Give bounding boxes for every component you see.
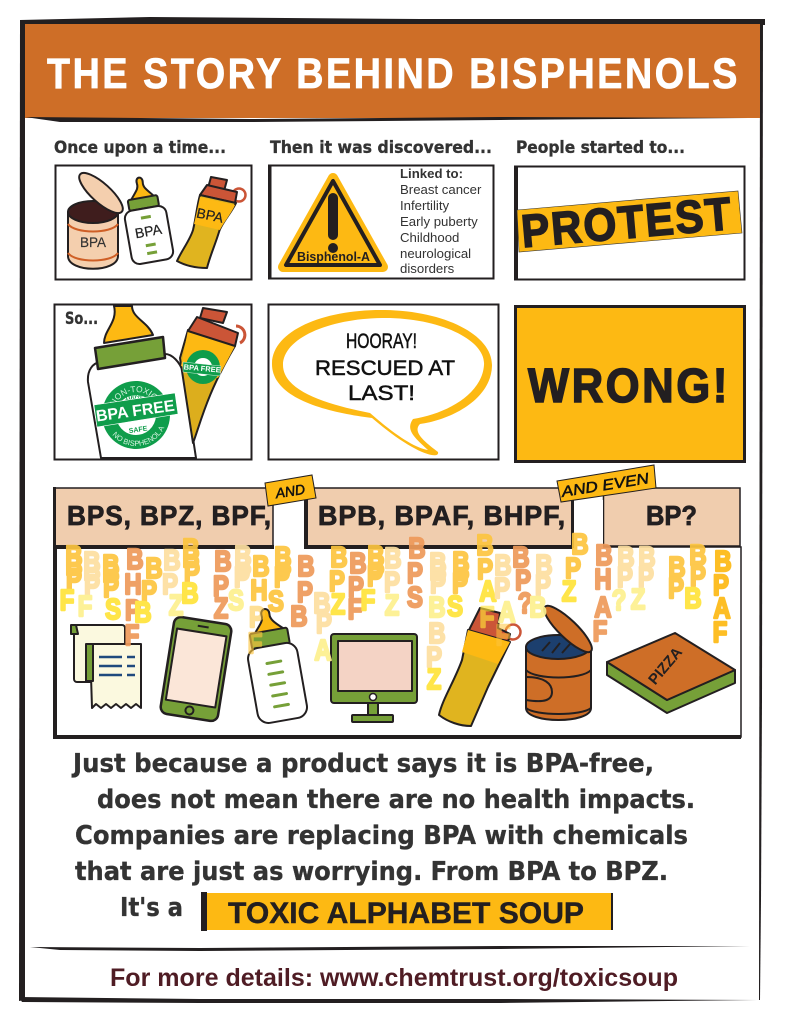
falling bisphenol letters: F [593, 615, 607, 648]
icon: baby bottle with BPA: BPA [134, 221, 164, 241]
falling bisphenol letters: B [234, 549, 252, 582]
falling bisphenol letters: P [348, 571, 364, 604]
falling bisphenol letters: Z [562, 575, 576, 608]
icon: sports bottle [439, 608, 520, 726]
falling bisphenol letters: A [314, 634, 332, 667]
falling bisphenol letters: A [594, 591, 612, 624]
falling bisphenol letters: P [141, 575, 157, 608]
badge: bpa free: NO BISPHENOL A [112, 427, 164, 446]
panel: hooray speech bubble [268, 304, 498, 460]
icon: open can [526, 600, 597, 720]
panel: alphabet soup [53, 465, 741, 739]
icon: monitor [331, 634, 417, 722]
falling bisphenol letters: P [477, 553, 493, 586]
falling bisphenol letters: P [213, 570, 229, 603]
falling bisphenol letters: B [689, 539, 707, 572]
falling bisphenol letters: A [479, 575, 497, 608]
falling bisphenol letters: B [408, 532, 426, 565]
body text [71, 749, 695, 887]
body text: does not mean there are no health impacts. [97, 785, 695, 815]
falling bisphenol letters: A [713, 592, 731, 625]
text: it's a: It's a [120, 893, 183, 923]
speech bubble [272, 310, 492, 455]
falling bisphenol letters: P [515, 564, 531, 597]
body text: that are just as worrying. From BPA to BPZ. [75, 857, 668, 887]
linked health effects list: Infertility [400, 198, 450, 213]
falling bisphenol letters: S [407, 581, 423, 614]
falling bisphenol letters: B [571, 528, 589, 561]
falling bisphenol letters: F [480, 601, 494, 634]
heading: people started to: People started to... [516, 138, 685, 158]
falling bisphenol letters: B [126, 543, 144, 576]
linked health effects list: Breast cancer [400, 182, 482, 197]
falling bisphenol letters: B [512, 541, 530, 574]
footer link: For more details: www.chemtrust.org/toxicsoup [110, 964, 678, 992]
speech text: LAST! [348, 382, 415, 405]
falling bisphenol letters: F [60, 584, 74, 617]
icon: phone [160, 616, 232, 722]
linked health effects list: Childhood [400, 230, 459, 245]
falling bisphenol letters: P [234, 561, 250, 594]
linked health effects list: disorders [400, 261, 455, 276]
icon: sports bottle with BPA: BPA [195, 204, 226, 226]
panel: protest [514, 166, 744, 280]
falling bisphenol letters: B [214, 545, 232, 578]
sticker: and even: AND EVEN [559, 470, 650, 501]
icon: sports bottle with BPA [177, 177, 246, 268]
badge: small bpa free [183, 350, 221, 384]
falling bisphenol letters: B [274, 541, 292, 574]
icon: warning triangle: Bisphenol-A [297, 250, 370, 264]
falling bisphenol letters: B [349, 547, 367, 580]
falling bisphenol letters: H [250, 574, 268, 607]
falling bisphenol letters: S [228, 584, 244, 617]
protest sticker [517, 191, 742, 252]
label box: BPS BPZ BPF [53, 487, 274, 549]
falling bisphenol letters: P [713, 569, 729, 602]
badge: bpa free [94, 381, 178, 449]
falling bisphenol letters: F [78, 590, 92, 623]
falling bisphenol letters: ? [518, 587, 532, 620]
falling bisphenol letters: B [428, 591, 446, 624]
label box: BPB BPAF BHPF [304, 488, 574, 549]
protest word: PROTEST [519, 187, 735, 257]
falling bisphenol letters: B [234, 540, 252, 573]
falling bisphenol letters: F [125, 619, 139, 652]
falling bisphenol letters: B [535, 549, 553, 582]
icon: baby bottle [240, 605, 309, 725]
falling bisphenol letters: P [162, 568, 178, 601]
falling bisphenol letters [60, 528, 732, 696]
falling bisphenol letters: B [83, 554, 101, 587]
icon: small tilted bottle [180, 308, 245, 443]
falling bisphenol letters: Z [169, 589, 183, 622]
icon: baby bottle with BPA [118, 174, 174, 265]
falling bisphenol letters: B [181, 577, 199, 610]
falling bisphenol letters: B [617, 541, 635, 574]
falling bisphenol letters: P [426, 641, 442, 674]
falling bisphenol letters: S [268, 585, 284, 618]
falling bisphenol letters: S [447, 590, 463, 623]
falling bisphenol letters: Z [427, 663, 441, 696]
sticker: and [265, 475, 316, 506]
linked health effects list: Early puberty [400, 214, 478, 229]
falling bisphenol letters: P [384, 566, 400, 599]
icon: receipts [71, 625, 141, 708]
falling bisphenol letters: B [252, 550, 270, 583]
falling bisphenol letters: P [430, 567, 446, 600]
falling bisphenol letters: P [66, 563, 82, 596]
falling bisphenol letters: B [65, 549, 83, 582]
falling bisphenol letters: P [84, 569, 100, 602]
falling bisphenol letters: P [367, 560, 383, 593]
panel: wrong [516, 306, 744, 462]
falling bisphenol letters: B [182, 533, 200, 566]
linked health effects list: Linked to: [400, 166, 463, 181]
falling bisphenol letters: B [313, 587, 331, 620]
falling bisphenol letters: B [297, 550, 315, 583]
icon: pizza box [607, 633, 735, 713]
body text: Just because a product says it is BPA-free, [71, 749, 654, 779]
icon: pizza box: PIZZA [645, 644, 686, 688]
icon: food can with BPA [68, 167, 128, 269]
falling bisphenol letters: B [384, 542, 402, 575]
panel: warning [268, 165, 494, 279]
falling bisphenol letters: B [452, 546, 470, 579]
badge: bpa free: BPA FREE [95, 398, 176, 425]
falling bisphenol letters: B [684, 582, 702, 615]
linked health effects list: neurological [400, 246, 471, 261]
falling bisphenol letters: F [248, 627, 262, 660]
falling bisphenol letters: B [65, 540, 83, 573]
heading: once upon a time: Once upon a time... [54, 138, 226, 158]
falling bisphenol letters: P [535, 569, 551, 602]
icon: large bottle [88, 306, 196, 458]
falling bisphenol letters: Z [385, 589, 399, 622]
speech text [315, 330, 455, 405]
falling bisphenol letters: P [494, 572, 510, 605]
falling bisphenol letters: B [428, 617, 446, 650]
sticker: and: AND [273, 481, 306, 501]
falling bisphenol letters: B [476, 529, 494, 562]
falling bisphenol letters: B [102, 549, 120, 582]
falling bisphenol letters: B [163, 544, 181, 577]
falling bisphenol letters: B [429, 554, 447, 587]
callout: toxic alphabet soup: TOXIC ALPHABET SOUP [228, 897, 584, 930]
falling bisphenol letters: P [316, 607, 332, 640]
falling bisphenol letters: P [103, 571, 119, 604]
falling bisphenol letters: A [498, 596, 516, 629]
falling bisphenol letters: B [367, 549, 385, 582]
falling bisphenol letters: Z [331, 588, 345, 621]
falling bisphenol letters: B [452, 554, 470, 587]
falling bisphenol letters: B [290, 600, 308, 633]
falling bisphenol letters: B [529, 591, 547, 624]
label box: BP? [604, 488, 740, 546]
falling bisphenol letters: F [361, 584, 375, 617]
falling bisphenol letters: P [452, 567, 468, 600]
falling bisphenol letters: P [690, 560, 706, 593]
falling bisphenol letters: Z [214, 592, 228, 625]
falling bisphenol letters: B [102, 556, 120, 589]
falling bisphenol letters: P [184, 556, 200, 589]
falling bisphenol letters: P [617, 561, 633, 594]
body text: Companies are replacing BPA with chemicals [75, 821, 688, 851]
falling bisphenol letters: P [297, 576, 313, 609]
falling bisphenol letters: ? [612, 584, 626, 617]
falling bisphenol letters: P [125, 594, 141, 627]
wrong word: WRONG! [528, 360, 730, 413]
falling bisphenol letters: P [565, 552, 581, 585]
sticker: and even [557, 465, 656, 502]
falling bisphenol letters: B [714, 545, 732, 578]
falling bisphenol letters: B [638, 541, 656, 574]
linked health effects list [400, 166, 482, 276]
falling bisphenol letters: F [348, 593, 362, 626]
falling bisphenol letters: B [494, 549, 512, 582]
falling bisphenol letters: S [105, 593, 121, 626]
panel: once upon a time products [56, 166, 252, 280]
falling bisphenol letters: P [249, 601, 265, 634]
falling bisphenol letters: H [594, 563, 612, 596]
falling bisphenol letters: B [595, 539, 613, 572]
badge: bpa free: 100% [124, 393, 144, 402]
falling bisphenol letters: B [134, 596, 152, 629]
falling bisphenol letters: H [124, 568, 142, 601]
icon: food can with BPA: BPA [80, 235, 106, 250]
falling bisphenol letters: B [330, 541, 348, 574]
falling bisphenol letters: P [274, 561, 290, 594]
label: so: So... [65, 309, 98, 329]
falling bisphenol letters: B [145, 552, 163, 585]
falling bisphenol letters: P [329, 565, 345, 598]
falling bisphenol letters: B [367, 540, 385, 573]
falling bisphenol letters: P [668, 572, 684, 605]
falling bisphenol letters: P [407, 557, 423, 590]
falling bisphenol letters: Z [631, 583, 645, 616]
falling bisphenol letters: B [182, 541, 200, 574]
badge: bpa free: NON-TOXIC [110, 386, 157, 403]
icon: warning triangle [283, 178, 383, 267]
falling bisphenol letters: B [274, 549, 292, 582]
label box: BPB BPAF BHPF: BPB, BPAF, BHPF, [318, 500, 566, 531]
badge: small bpa free: BPA FREE [183, 362, 221, 375]
falling bisphenol letters: F [496, 619, 510, 652]
label box: BPS BPZ BPF: BPS, BPZ, BPF, [67, 500, 272, 531]
label box: BP?: BP? [646, 500, 697, 531]
badge: bpa free: SAFE [128, 426, 148, 435]
falling bisphenol letters: B [668, 551, 686, 584]
speech text: RESCUED AT [315, 357, 455, 380]
heading: then it was discovered: Then it was discovered... [270, 138, 492, 158]
falling bisphenol letters: B [83, 546, 101, 579]
header banner [25, 24, 760, 122]
speech text: HOORAY! [346, 330, 417, 353]
falling bisphenol letters: F [713, 616, 727, 649]
falling bisphenol letters: B [429, 547, 447, 580]
panel: bpa free products [54, 304, 252, 460]
falling bisphenol letters: P [638, 561, 654, 594]
